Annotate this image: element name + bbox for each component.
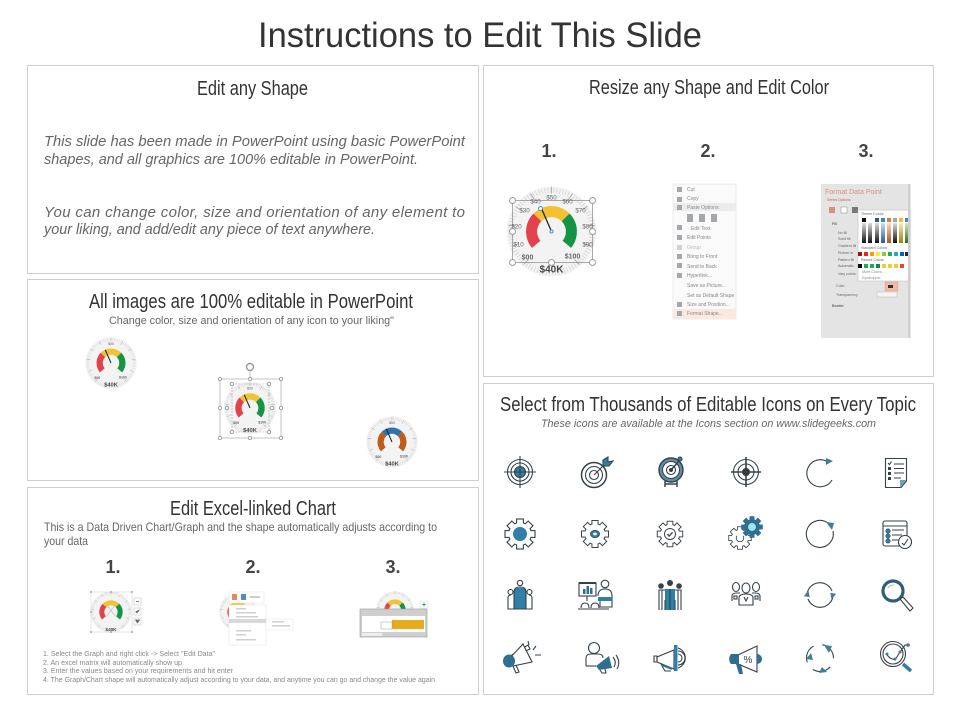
gauge small 1: $00 [94,376,100,380]
format data point pane: Format Data Point [825,189,882,196]
step number 1: 1. [105,557,121,577]
gauge with selection handles: $10 [513,242,524,248]
gauge small 3 recoloured: $40K [385,461,400,467]
step number 2: 2. [245,557,261,577]
panel: resize any shape [484,66,934,376]
text block: excel chart description: your data [44,534,88,548]
panel: excel-linked chart [28,488,478,694]
chart step 1 gauge: $40K [106,627,117,632]
text block: excel chart description: This is a Data Driven Chart/Graph and the shape automatically adjusts according to [44,520,437,534]
icon: magnifier [883,581,913,611]
format data point pane: Series Options [827,198,851,202]
format data point pane: Recent Colors [861,258,884,262]
gauge with selection handles: $60 [562,198,573,206]
format data point pane: Automatic [838,264,854,268]
step number 2: 2. [700,141,716,161]
gauge with selection handles: $20 [511,224,522,230]
text block: excel chart description [44,520,437,548]
icon: reticle [731,457,761,487]
panel: icons [484,384,934,694]
context menu: Copy [687,196,699,202]
icon: form with check [883,521,912,548]
context menu: Paste Options: [687,205,720,211]
gauge small 3 recoloured: $100 [400,454,408,458]
heading: edit any shape: Edit any Shape [197,78,308,100]
format data point pane: Color [836,284,845,288]
icon: discount megaphone [729,646,762,674]
gauge small 1: $40K [104,382,119,388]
gauge with selection handles: $30 [519,208,530,214]
icon: team heads [732,582,760,605]
icon: discount megaphone: % [744,655,753,666]
gauge small 3 recoloured: $50 [389,421,395,425]
gauge with selection handles: $90 [582,242,593,248]
step number 3: 3. [858,141,874,161]
gauge with selection handles [506,186,596,276]
panel: all images editable [28,280,478,480]
icon: megaphone side view [654,645,685,671]
icon: gear filled [505,519,535,549]
title: Instructions to Edit This Slide [258,16,702,55]
format data point pane: No fill [838,231,847,235]
format data point pane: Border [832,304,844,308]
heading: all images editable: All images are 100% editable in PowerPoint [89,291,413,313]
icon: open circular arrow [807,458,833,487]
chart step 3 gauge with data sheet [360,591,428,637]
chart step 1 gauge [90,591,141,633]
heading: resize any shape: Resize any Shape and Edit Color [589,77,829,99]
context menu: Send to Back [687,264,717,270]
format data point pane: Fill [832,222,837,226]
instructions list: 4. The Graph/Chart shape will automatically adjust according to your data, and anytime you can go and change the value again [43,675,435,684]
chart step 2 gauge with context menu [219,592,293,645]
format data point pane: Pattern fill [838,258,854,262]
heading: excel chart: Edit Excel-linked Chart [170,498,336,520]
context menu: Edit Points [687,235,711,241]
text block: intro: This slide has been made in PowerPoint using basic PowerPoint [44,133,466,150]
panel: edit any shape [28,66,478,274]
context menu: Size and Position... [687,302,730,308]
gauge with selection handles: $80 [582,224,593,230]
context menu: Edit Text [691,226,711,232]
text block: intro [43,133,466,238]
subheading: Change color, size and orientation of any icon to your liking" [109,315,394,327]
format data point pane: Vary colors [838,272,856,276]
icon: meeting group [508,580,532,609]
text block: intro: shapes, and all graphics are 100% editable in PowerPoint. [44,151,418,168]
format data point pane: Picture or [838,251,854,255]
text block: intro: your liking, and add/edit any piece of text anywhere. [43,221,375,238]
gauge with selection handles: $40K [540,264,564,276]
gauge small 1 [85,337,137,389]
text block: intro: You can change color, size and orientation of any element to [44,204,465,221]
icon: person with megaphone [586,642,619,673]
gauge small 2 with selection frames: $50 [247,386,253,390]
instructions list: 2. An excel matrix will automatically show up [43,658,182,667]
gauge small 2 with selection frames: $40K [243,428,258,434]
format data point pane: Theme Colors [861,212,884,216]
format data point pane: Standard Colors [861,246,887,250]
icon: checklist document [886,458,906,488]
format data point pane: Eyedropper [862,276,881,280]
icon: presenter with chart [578,580,612,609]
format data point pane: Transparency [836,293,858,297]
context menu: Cut [687,187,695,193]
gauge small 1: $100 [119,375,127,379]
gauge with selection handles: $00 [522,254,533,262]
icon: gear with oval [582,520,608,548]
step number 3: 3. [385,557,401,577]
gauge small 2 with selection frames: $100 [258,421,266,425]
gauge small 2 with selection frames [218,364,283,440]
icon: dart target [582,457,613,488]
icon: archery target [659,457,683,487]
context menu: Format Shape... [687,311,723,317]
format data point pane: Solid fill [838,237,851,241]
gauge with selection handles: $100 [565,254,580,260]
instructions list: 3. Enter the values based on your requirements and hit enter [43,666,234,675]
context menu: Bring to Front [687,254,718,260]
icon: megaphone [503,641,541,673]
icon: two-arrow cycle [804,583,836,607]
gauge small 1: $50 [108,342,114,346]
subheading: icons: These icons are available at the Icons section on www.slidegeeks.com [541,418,876,430]
instructions list [43,649,435,684]
gauge with selection handles: $50 [546,194,557,202]
step number 1: 1. [541,141,557,161]
context menu: Save as Picture... [687,283,726,289]
gauge with selection handles: $70 [575,208,586,214]
context menu: Set as Default Shape [687,293,734,299]
icon: three-arrow cycle [804,642,836,674]
icon: business team [658,580,682,610]
gauge small 3 recoloured [366,416,418,468]
gauge small 3 recoloured: $00 [375,455,381,459]
icon: crosshair target [504,456,536,488]
context menu: Group [687,245,701,251]
context menu [673,184,736,319]
gauge with selection handles: $40 [530,198,541,206]
gauge small 2 with selection frames: $00 [233,421,239,425]
format data point pane: More Colors... [862,270,885,274]
icon: circular arrow [806,520,834,547]
icon: two gears [729,516,763,549]
format data point pane: Gradient fill [838,244,856,248]
context menu: Hyperlink... [687,273,712,279]
instructions list: 1. Select the Graph and right click -> Select "Edit Data" [43,649,215,658]
format data point pane [821,184,911,338]
icon: gear with check [657,521,683,547]
icon: analytics magnifier [880,642,911,671]
